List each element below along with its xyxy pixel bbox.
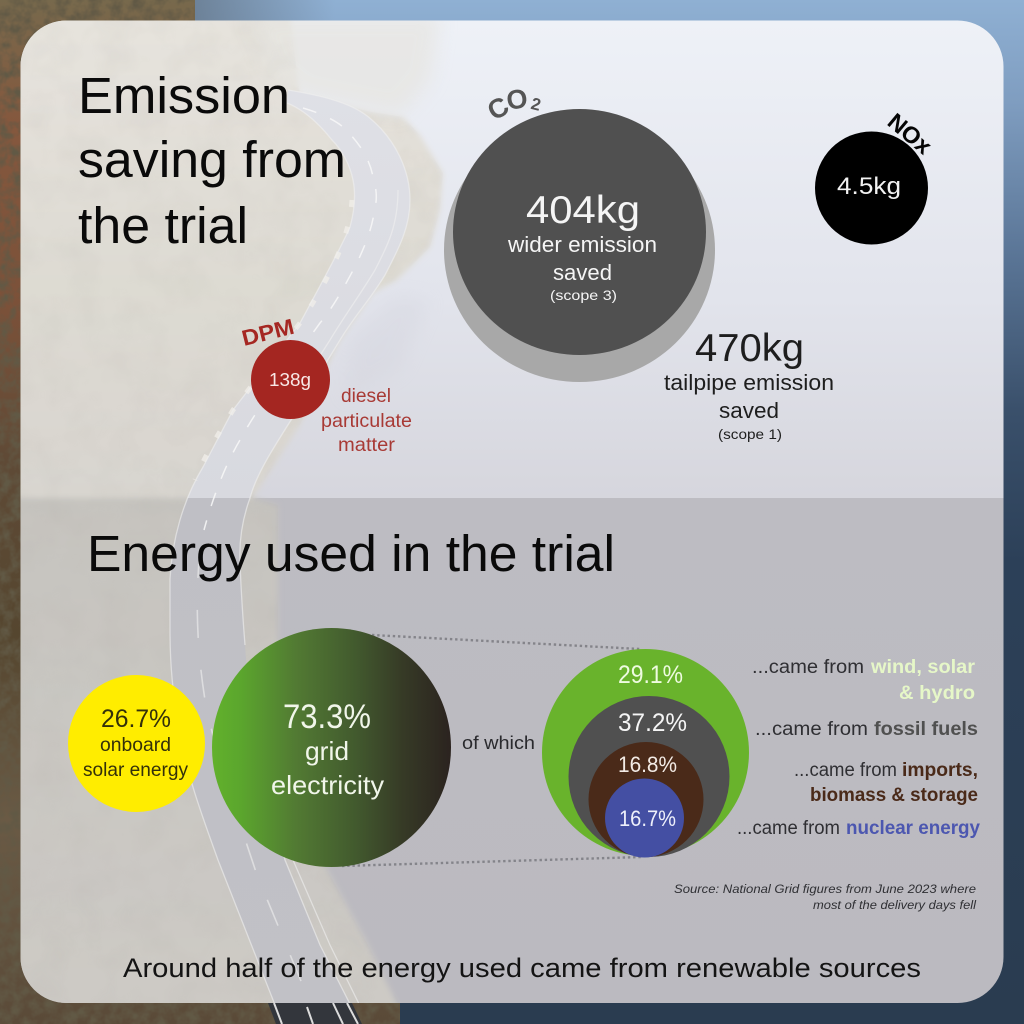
solar energy circle: solar energy [83,759,188,781]
NOx circle [815,132,928,244]
DPM description: diesel [341,385,391,407]
tailpipe emission text [664,327,834,442]
grid electricity circle [212,628,451,867]
label: imports biomass storage: ...came from [794,760,897,781]
source note: Source: National Grid figures from June 2023 where [674,884,976,896]
wider emission text: saved [553,260,612,285]
wider emission circle [453,109,706,355]
label: fossil fuels [755,719,978,740]
fossil fuels [568,696,730,857]
background photo: shaded shoreline at top [195,0,335,21]
heading: emission saving: the trial [78,197,248,254]
label: wind solar hydro [752,657,976,704]
solar energy circle [68,675,205,812]
DPM description [321,385,412,456]
road shoulder markers [195,200,352,480]
dotted connector lines [342,635,642,866]
wind solar hydro [542,649,749,856]
DPM circle [251,340,330,419]
DPM description: matter [338,434,396,456]
label: fossil fuels: fossil fuels [874,719,978,740]
label: wind solar hydro: ...came from [752,657,864,678]
grid electricity circle: grid [305,736,349,766]
source note [674,884,976,912]
energy mix labels [737,657,980,839]
nested energy mix circles [542,649,749,858]
nested energy mix circles: 29.1% [618,661,683,689]
nested energy mix circles: 37.2% [618,709,687,737]
tailpipe emission text: 470kg [695,327,804,370]
tailpipe emission text: tailpipe emission [664,370,834,395]
CO2 label: 2 [529,94,543,115]
nested energy mix circles: 16.7% [619,806,676,831]
foggy headland [15,15,443,1010]
label: wind solar hydro: & hydro [899,683,975,704]
source note: most of the delivery days fell [813,900,976,912]
grid electricity circle: electricity [271,770,384,800]
solar energy circle: 26.7% [101,705,171,733]
imports biomass storage [588,742,704,857]
heading: energy used: Energy used in the trial [87,525,615,582]
heading: emission saving: saving from [78,131,346,188]
DPM description: particulate [321,410,412,432]
label: nuclear [737,818,980,839]
background photo: forest edge [0,0,400,1024]
CO2 label: O [505,83,530,116]
nested energy mix circles: 16.8% [618,752,677,777]
label: imports biomass storage: imports, [902,760,978,781]
NOx value: 4.5kg [837,173,901,200]
DPM chart [239,314,412,456]
grid electricity circle: 73.3% [283,698,371,736]
tailpipe circle [444,118,715,382]
footer statement: Around half of the energy used came from renewable sources [123,953,921,983]
heading: emission saving: Emission [78,67,290,124]
DPM value: 138g [269,370,311,390]
wider emission text: 404kg [526,189,640,232]
CO2 label: C [482,91,514,126]
label: wind solar hydro: wind, solar [870,657,976,678]
CO2 label [482,83,543,126]
DPM label: DPM [239,314,297,351]
label: nuclear: nuclear energy [846,818,980,839]
foggy road [170,90,410,1010]
CO2 chart [444,83,834,442]
NOx label: NOx [883,108,937,159]
heading: emission saving [78,67,346,254]
label: imports biomass storage: biomass & storage [810,785,978,806]
of which label: of which [462,733,535,753]
wider emission text [507,189,657,303]
shadow on water beside headland [345,295,430,400]
label: imports biomass storage [794,760,978,806]
tailpipe emission text: (scope 1) [718,427,782,442]
wider emission text: wider emission [507,232,657,257]
label: fossil fuels: ...came from [755,719,868,740]
label: nuclear: ...came from [737,818,840,839]
nuclear [605,778,684,858]
fog-covered trees above the road [292,20,438,110]
tailpipe emission text: saved [719,398,779,423]
background photo: road below panel [268,1003,362,1024]
solar energy circle: onboard [100,734,171,756]
NOx chart [815,108,937,245]
headland texture [20,20,460,1004]
wider emission text: (scope 3) [550,288,617,303]
